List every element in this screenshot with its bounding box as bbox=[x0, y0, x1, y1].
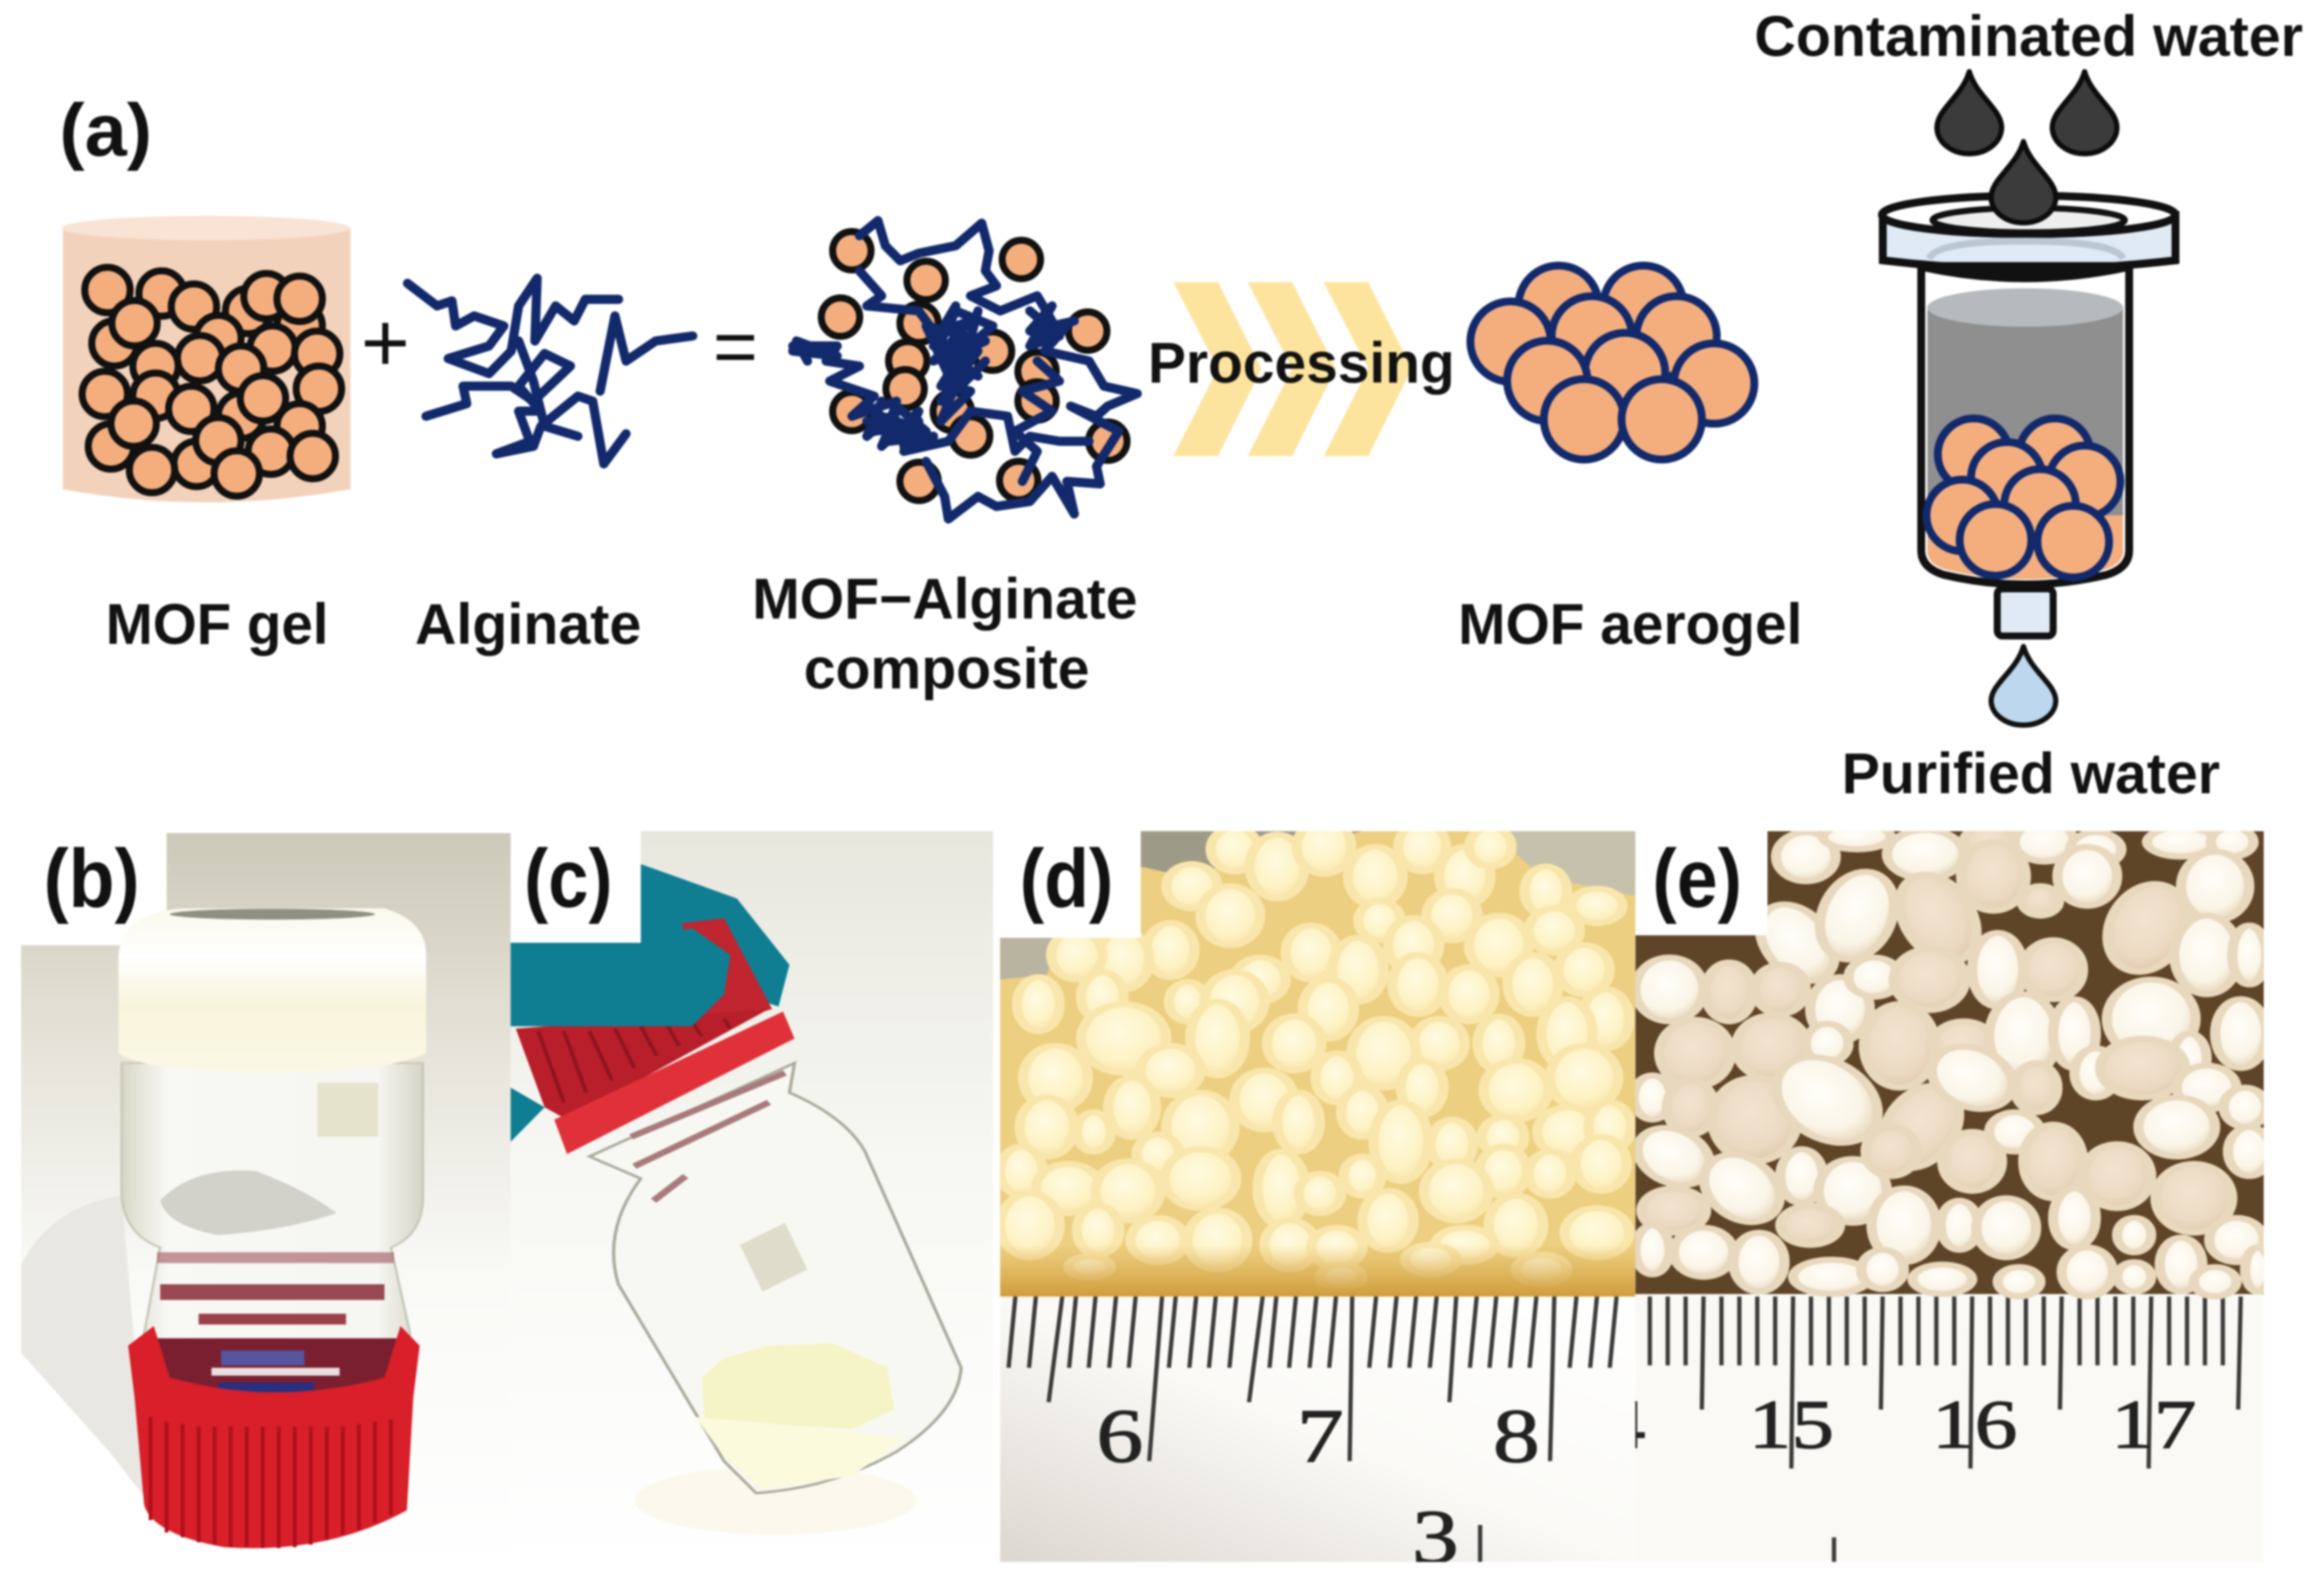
white gel plug bbox=[119, 909, 426, 1073]
label (d) white box bbox=[996, 831, 1141, 937]
ruler number 14 fragment: 4 bbox=[1603, 1386, 1645, 1463]
ruler strip bbox=[1000, 1296, 1636, 1562]
glass body bbox=[121, 1063, 423, 1402]
ruler number 15: 15 bbox=[1749, 1386, 1834, 1463]
teal glove finger bbox=[511, 928, 730, 1027]
column tube bbox=[1921, 266, 2129, 584]
panel: (d) wet beads with ruler bbox=[996, 819, 1636, 1580]
photo background bbox=[21, 833, 511, 1565]
label patch reflection bbox=[740, 1223, 807, 1291]
red cap bbox=[128, 1326, 419, 1548]
equals sign: = bbox=[713, 303, 757, 390]
label (e): (e) bbox=[1652, 833, 1742, 924]
plastic bag corners bbox=[1000, 831, 1636, 979]
icon: alginate chains bbox=[407, 279, 693, 464]
vial rim bbox=[169, 909, 375, 920]
bead bed background bbox=[1000, 831, 1636, 1296]
milky residue bbox=[695, 1344, 903, 1490]
label: Contaminated water: Contaminated water bbox=[1754, 3, 2303, 68]
label (c) white box bbox=[511, 831, 640, 943]
label: Alginate: Alginate bbox=[415, 591, 641, 656]
table reflection bbox=[634, 1466, 916, 1535]
icon: filter column bbox=[1882, 196, 2175, 636]
photo background bbox=[511, 831, 993, 1553]
gel residue bbox=[160, 1171, 336, 1235]
ruler number 17: 17 bbox=[2111, 1386, 2196, 1463]
pebble bed background bbox=[1636, 831, 2264, 1294]
label: MOF aerogel: MOF aerogel bbox=[1458, 591, 1802, 656]
label: Purified water: Purified water bbox=[1842, 741, 2220, 805]
ruler number 8: 8 bbox=[1493, 1394, 1539, 1479]
label: MOF gel: MOF gel bbox=[106, 591, 329, 656]
vial shadow bbox=[21, 1196, 148, 1501]
label: MOF-Alginate composite bbox=[752, 566, 1138, 701]
label: MOF-Alginate composite: composite bbox=[804, 636, 1089, 701]
ruler number 7: 7 bbox=[1297, 1394, 1344, 1479]
aerogel in column bbox=[1926, 418, 2120, 577]
label (c): (c) bbox=[524, 833, 612, 925]
icon: purified drop bbox=[1991, 646, 2056, 725]
icon: MOF aerogel cluster bbox=[1470, 266, 1754, 460]
ruler ticks bbox=[1650, 1296, 2241, 1562]
red cap bbox=[515, 918, 794, 1154]
panel: (c) tilted vial photo bbox=[511, 831, 993, 1553]
ruler number 16: 16 bbox=[1932, 1386, 2017, 1463]
ruler ticks bbox=[1008, 1296, 1616, 1562]
neck reflections bbox=[154, 1252, 400, 1402]
panel: (e) dried aerogel beads with ruler bbox=[1603, 822, 2271, 1562]
beads bbox=[1000, 819, 1631, 1289]
ruler number 6: 6 bbox=[1096, 1394, 1144, 1479]
label (a): (a) bbox=[59, 89, 152, 171]
icon: contaminated drops bbox=[1937, 72, 2117, 223]
icon: MOF gel cylinder with particles bbox=[62, 216, 350, 502]
label: MOF-Alginate composite: MOF−Alginate bbox=[752, 566, 1138, 631]
ruler number 3: 3 bbox=[1412, 1496, 1459, 1580]
label (d): (d) bbox=[1020, 833, 1113, 924]
bottle neck reflections bbox=[631, 1073, 785, 1200]
panel: (a) process schematic bbox=[59, 3, 2303, 805]
panel: (b) inverted vial photo bbox=[21, 833, 511, 1565]
column lid bbox=[1882, 196, 2175, 282]
glass bottle bbox=[590, 1063, 961, 1493]
teal glove back bbox=[511, 864, 790, 1142]
golden liquid at bottom bbox=[1000, 1245, 1636, 1296]
arrow: yellow chevrons bbox=[1173, 282, 1412, 456]
label (b): (b) bbox=[44, 833, 140, 925]
column outlet bbox=[1997, 589, 2053, 636]
ruler strip bbox=[1636, 1294, 2264, 1562]
plus sign: + bbox=[361, 296, 410, 390]
label (e) white box bbox=[1636, 831, 1767, 936]
icon: MOF-alginate composite bbox=[792, 221, 1138, 519]
text: Processing: Processing bbox=[1148, 330, 1455, 395]
pebbles bbox=[1625, 822, 2271, 1296]
label patch reflection bbox=[317, 1082, 378, 1137]
